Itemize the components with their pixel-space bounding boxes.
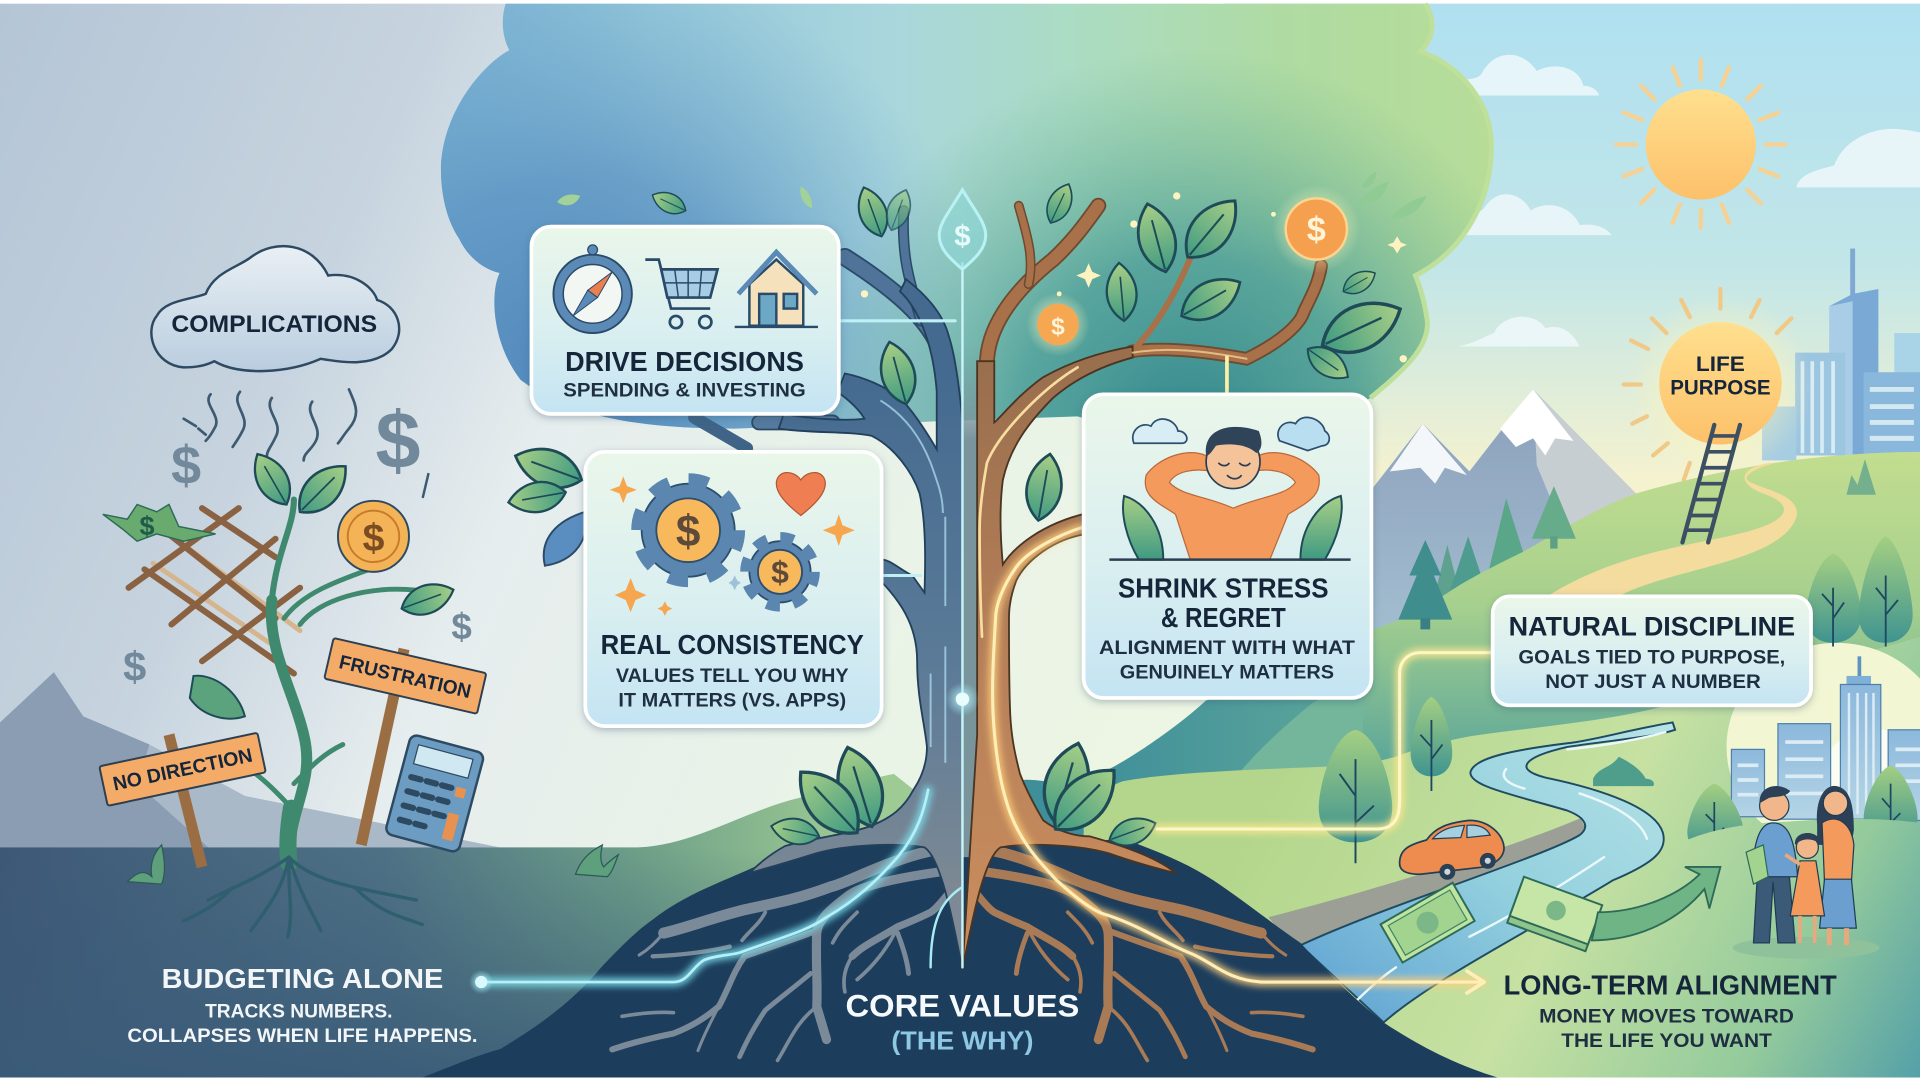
card: shrink stress [1084,394,1371,698]
complications cloud: COMPLICATIONS [171,311,377,338]
city skyline: top [1762,249,1920,460]
card: shrink stress: & REGRET [1161,602,1286,633]
card: natural discipline: NOT JUST A NUMBER [1545,671,1761,693]
card: natural discipline: NATURAL DISCIPLINE [1509,612,1795,642]
road [1269,818,1592,958]
icon: gears: $ [771,554,789,590]
root mound [422,840,1498,1078]
text: core values [846,987,1079,1055]
ladder [1682,425,1740,542]
complications cloud [151,246,399,371]
card: shrink stress: ALIGNMENT WITH WHAT [1099,637,1355,659]
floating dollars [123,396,472,690]
life purpose sun [1624,289,1812,480]
glow lines: yellow [980,350,1494,993]
branches: gray [694,211,945,448]
card: shrink stress: GENUINELY MATTERS [1120,661,1334,683]
broken trellis [129,508,300,673]
car [1400,820,1504,880]
clouds [1445,55,1920,347]
gray highlights [880,400,945,763]
sign: no direction [99,733,266,867]
mountains: left [0,672,500,847]
icon: gears: $ [676,507,700,556]
teal hill [1010,649,1384,857]
sky [1224,4,1920,665]
text: budgeting alone: BUDGETING ALONE [162,963,443,994]
card: shrink stress: SHRINK STRESS [1118,573,1329,604]
front ground [1084,637,1920,1078]
icon: dollar drop [939,190,986,269]
card: real consistency [585,452,882,726]
plant roots [184,857,422,937]
text: long-term alignment [1504,969,1837,1052]
card: real consistency: REAL CONSISTENCY [601,629,864,660]
grass tufts [127,845,618,884]
trunk: gray half [749,279,962,970]
card: real consistency: IT MATTERS (VS. APPS) [618,690,846,712]
card: natural discipline: GOALS TIED TO PURPOSE, [1518,647,1785,669]
floating dollars: $ [171,436,201,496]
coin: $ [363,517,385,560]
fir trees: behind hill [1430,498,1531,612]
node dot: budgeting [469,970,493,994]
card: natural discipline [1493,596,1811,705]
roots: brown [975,850,1313,1060]
floating dollars: $ [451,606,472,647]
city skyline: lower [1727,643,1920,851]
card: real consistency: VALUES TELL YOU WHY [616,665,849,687]
coins on tree: $ [1307,211,1326,249]
icon: cart [645,260,718,328]
money bills [1381,877,1602,963]
mountains: right [1371,389,1636,661]
text: budgeting alone [127,963,478,1047]
tree [506,171,1427,970]
coin [338,501,409,572]
hill with path [1359,452,1920,784]
icon: house [735,252,818,327]
sign: frustration: FRUSTRATION [337,651,473,703]
coins on tree: $ [1051,313,1065,340]
icon: dollar drop: $ [954,220,971,253]
sign: no direction: NO DIRECTION [111,745,254,796]
icon: gears [638,480,814,606]
card: drive decisions: SPENDING & INVESTING [563,380,806,402]
calculator [385,734,485,853]
floating dollars: $ [375,396,420,486]
sign: frustration [324,638,486,845]
torn bill [103,504,216,541]
canopy [429,0,1506,453]
trees: right side [1319,536,1918,863]
fir trees: front [1398,486,1576,629]
panel: budgeting alone scene [99,246,618,937]
stress squiggles [184,389,356,460]
growth arrow [1592,867,1720,940]
river [1300,722,1675,1022]
life purpose label: PURPOSE [1670,376,1771,399]
floating dollars: $ [123,643,146,690]
trunk: brown half [962,347,1176,970]
branches: brown [987,206,1321,367]
plant leaves [190,447,458,719]
card: drive decisions: DRIVE DECISIONS [565,346,804,377]
sun [1616,60,1785,228]
center ground [0,774,967,1078]
family [1733,786,1880,959]
torn bill: $ [139,511,154,541]
sparkles [610,476,855,616]
icon: relaxed person [1109,417,1351,560]
node dot: trunk [945,682,980,716]
front hill near family [1681,819,1920,1078]
coins on tree [1026,185,1360,394]
shrub [1593,757,1654,786]
text: budgeting alone: COLLAPSES WHEN LIFE HAPPENS. [127,1025,478,1047]
life purpose label [1670,353,1771,399]
plant stem [202,500,416,863]
sparkles [861,192,1407,362]
text: core values: (THE WHY) [891,1027,1033,1055]
text: long-term alignment: LONG-TERM ALIGNMENT [1504,969,1837,1000]
icon: heart [776,473,825,516]
life purpose label: LIFE [1696,353,1745,376]
card: drive decisions [531,227,839,414]
text: long-term alignment: MONEY MOVES TOWARD [1539,1005,1794,1027]
icon: compass [553,245,632,333]
center trunk strip [953,343,980,857]
text: budgeting alone: TRACKS NUMBERS. [205,1001,392,1023]
leaves [506,171,1427,852]
text: core values: CORE VALUES [846,987,1079,1023]
glow lines: cyan [481,263,962,982]
roots: gray [612,850,950,1060]
text: long-term alignment: THE LIFE YOU WANT [1561,1030,1772,1052]
